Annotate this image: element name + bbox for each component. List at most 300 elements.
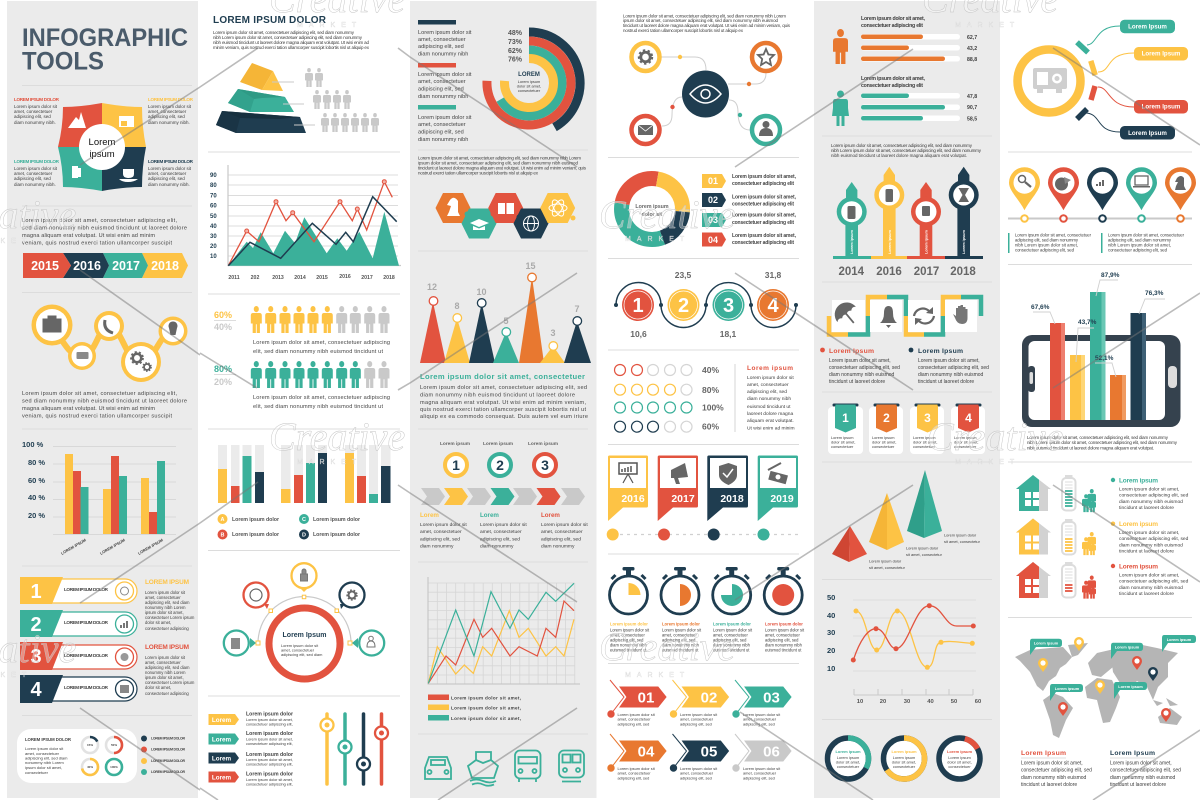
step process: Lorem ipsum dolor sit (480, 523, 527, 528)
paragraph (22, 218, 187, 246)
numbered list: LOREM IPSUM DOLOR (64, 653, 109, 658)
coloured notes: amet, consectetuer (418, 37, 466, 43)
dot ratings: 80% (702, 385, 719, 395)
line and area chart: 2014 (294, 275, 306, 281)
paragraph (831, 143, 982, 158)
icon: bell (880, 306, 897, 328)
icon: open book (498, 203, 514, 214)
curve chart: 30 (904, 699, 910, 705)
3D pyramids (832, 470, 981, 570)
line and area chart: 90 (210, 173, 217, 179)
stopwatch captions: diam nonummy nibh (765, 642, 803, 648)
line and area chart: 2017 (361, 275, 373, 281)
numbered arrows: Lorem ipsum dolor sit (743, 712, 780, 717)
curve chart: 20 (880, 699, 886, 705)
watermark: Creative (599, 192, 735, 237)
numbered arrows: 03 (763, 690, 780, 706)
hub diagram (224, 563, 384, 679)
spike chart caption: Lorem ipsum dolor sit amet, consectetuer adipiscing elit, sed (420, 385, 587, 391)
bar chart: LOREM IPSUM (60, 537, 88, 556)
year flags: 2016 (621, 493, 645, 505)
tower chart: Lorem ipsum (888, 230, 892, 254)
curve chart: 50 (827, 593, 835, 602)
icon: briefcase (43, 316, 61, 332)
segmented donut: dolor sit (642, 212, 663, 218)
line and area chart: 2016 (339, 274, 351, 280)
stopwatch captions: Lorem ipsum dolor (610, 622, 648, 626)
progress rings: consectetuer (837, 764, 860, 769)
bar chart: 20 % (28, 511, 45, 520)
transport icons (425, 750, 584, 786)
coloured notes: Lorem ipsum dolor sit (418, 72, 471, 78)
rating note: laoreet dolore magna (747, 411, 793, 417)
ring legend: LOREM IPSUM DOLOR (151, 748, 185, 752)
line and area chart: 70 (210, 194, 217, 200)
gender bars: male (833, 16, 977, 64)
paragraph: veniam, quis nostrud exerci tation ullamcorper suscipit (22, 240, 172, 246)
people chart 80/20: Lorem ipsum dolor sit amet, consectetuer adipiscing (253, 395, 390, 401)
bookmark cards: dolor sit amet, (831, 440, 855, 444)
map callouts: Lorem ipsum (1034, 640, 1059, 646)
watermark: Creative (927, 414, 1063, 459)
list notes (145, 579, 195, 696)
map captions: consectetuer adipiscing elit, sed (1110, 768, 1181, 774)
3D pyramids: sit amet, consectetur (944, 539, 981, 544)
numbered timeline: 3 (723, 295, 734, 317)
bar chart: 60 % (28, 476, 45, 485)
watermark (0, 0, 1063, 679)
tag list: Lorem ipsum dolor sit amet, (246, 718, 293, 722)
people chart 60/40: 60% (214, 310, 232, 320)
year flags: 2017 (671, 493, 695, 505)
stopwatch captions: Lorem ipsum dolor sit (662, 628, 701, 632)
panel: ring summary: 50% (111, 743, 117, 747)
stopwatch captions: Lorem ipsum dolor (713, 622, 751, 626)
coloured notes: diam nonummy nibh (418, 52, 468, 58)
rating note (735, 364, 795, 432)
zigzag captions: Lorem ipsum dolor sit amet, (829, 358, 891, 364)
icon: laptop (1133, 176, 1150, 188)
numbered arrows: adipiscing elit, sed (618, 721, 649, 726)
numbered list: 1 (30, 581, 42, 603)
watermark: MARKET (297, 22, 362, 29)
household notes: Lorem ipsum (1119, 478, 1158, 484)
paragraph: nostrud exerci tation ullamcorper suscipit lobortis nisl ut aliquip ex (418, 170, 539, 176)
hub diagram: Lorem Ipsum (283, 632, 326, 639)
curve chart: 50 (951, 699, 957, 705)
curve chart: 60 (975, 699, 981, 705)
quadrant captions: LOREM IPSUM DOLOR (14, 97, 60, 102)
list notes: adipiscing elit, sed diam (145, 665, 190, 670)
numbered tags: Lorem ipsum dolor sit amet, (732, 174, 797, 180)
tower chart: 2018 (950, 266, 976, 278)
quadrant captions: Lorem ipsum dolor sit (148, 166, 191, 171)
phone bar chart: 67,6% (1031, 304, 1050, 311)
safe diagram: Lorem Ipsum (1142, 104, 1181, 111)
phone caption: Lorem ipsum dolor sit amet, consectetuer adipiscing elit, sed diam nonummy (1027, 435, 1169, 440)
household notes: consectetuer adipiscing elit, sed (1119, 578, 1189, 584)
map captions: diam nonummy nibh euismod (1110, 775, 1176, 781)
quadrant captions: amet, consectetuer (14, 171, 53, 176)
list notes: nonummy nibh Lorem (145, 670, 186, 675)
year flags: 2018 (720, 493, 744, 505)
quadrant captions: amet, consectetuer (14, 109, 53, 114)
centre label: Lorem (89, 137, 115, 148)
bookmark cards: Lorem ipsum (872, 435, 894, 440)
coloured notes: adipiscing elit, sed (418, 86, 464, 92)
bookmark cards: Lorem ipsum (954, 435, 976, 440)
zigzag captions: diam nonummy nibh euismod (829, 372, 895, 378)
household notes: tincidunt ut laoreet dolore (1119, 505, 1174, 511)
progress rings: dolor sit amet, (836, 760, 860, 764)
zigzag captions: Lorem Ipsum (918, 348, 963, 355)
zigzag captions: tincidunt ut laoreet dolore (918, 379, 974, 385)
icon: shop (119, 116, 134, 127)
spike chart caption (420, 372, 588, 420)
people chart 80/20: 80% (214, 364, 232, 374)
numbered arrows: 06 (763, 744, 780, 760)
stacked bars (218, 445, 390, 503)
numbered tags: Lorem ipsum dolor sit amet, (732, 233, 797, 239)
stopwatch captions: Lorem ipsum dolor sit (765, 628, 804, 632)
stacked bars legend (218, 514, 360, 540)
segmented donut (622, 179, 683, 240)
list notes: dolor sit amet, (145, 620, 171, 625)
spike chart: 5 (503, 316, 509, 326)
people chart 60/40 (214, 306, 390, 355)
dot ratings: 100% (702, 402, 724, 412)
step process: Lorem (420, 512, 439, 519)
bookmark cards: dolor sit amet, (872, 440, 896, 444)
icon: star (758, 49, 774, 65)
phone bar chart: 43,7% (1078, 319, 1097, 326)
numbered arrows: adipiscing elit, sed (618, 775, 649, 780)
tag list: Lorem ipsum dolor sit amet, (246, 758, 293, 762)
centre label: ipsum (89, 149, 115, 160)
stopwatch captions: amet, consectetuer (610, 632, 645, 638)
icon: mini chart (1096, 180, 1104, 186)
panel: ring summary: adipiscing elit, sed diam (25, 756, 68, 760)
zigzag captions: tincidunt ut laoreet dolore (829, 379, 885, 385)
icon: gears (131, 352, 151, 371)
household notes: consectetuer adipiscing elit, sed (1119, 492, 1189, 498)
curve chart: 10 (857, 699, 863, 705)
numbered timeline (614, 270, 798, 339)
quadrant captions: diam nonummy nibh. (14, 120, 56, 125)
household notes: tincidunt ut laoreet dolore (1119, 591, 1174, 597)
pins captions: nibh Lorem ipsum dolor sit amet, (1015, 242, 1078, 248)
gender bars: female: Lorem ipsum dolor sit amet, (861, 76, 926, 82)
coloured notes: adipiscing elit, sed (418, 130, 464, 136)
icon: bus (515, 750, 540, 782)
paragraph: magna aliquam erat volutpat. Ut wisi enim ad minim (22, 233, 155, 239)
stopwatch captions: diam nonummy nibh (610, 642, 648, 648)
step process: Lorem ipsum (440, 441, 470, 447)
stopwatch captions: diam nonummy nibh (713, 642, 751, 648)
coloured notes: diam nonummy nibh (418, 137, 468, 143)
stopwatch captions: adipiscing elit, sed (662, 638, 696, 642)
spike chart caption: aliquip ex ea commodo consequat. Duis autem vel eum iriure (420, 414, 588, 420)
list notes: amet, consectetuer (145, 660, 181, 665)
numbered arrows: amet, consectetuer (743, 771, 777, 776)
panel: ring summary: ipsum dolor sit amet, (25, 765, 62, 770)
step process: amet, consectetuer (480, 529, 522, 535)
intro text: nibh euismod tincidunt ut laoreet dolore magna aliquam erat volutpat. Ut wisi enim ad (213, 40, 369, 45)
zigzag captions: Lorem ipsum dolor sit amet, (918, 358, 980, 364)
stacked bars legend: Lorem ipsum dolor (313, 532, 360, 538)
numbered arrows: Lorem ipsum dolor sit (618, 766, 655, 771)
year flags (608, 456, 798, 521)
progress rings: consectetuer (948, 764, 971, 769)
paragraph: sed diam nonummy nibh euismod tincidunt ut laoreet dolore (22, 398, 187, 404)
rating note: Lorem ipsum dolor sit (747, 376, 794, 381)
numbered timeline: 23,5 (675, 270, 692, 280)
phone bar chart: 52,1% (1095, 355, 1114, 362)
panel: ring summary: nonummy nibh Lorem (25, 760, 64, 765)
numbered arrows: Lorem ipsum dolor sit (680, 712, 717, 717)
stopwatch captions: Lorem ipsum dolor (662, 622, 700, 626)
phone caption (1027, 435, 1178, 450)
numbered arrows: adipiscing elit, sed (680, 775, 712, 780)
quadrant captions: amet, consectetuer (148, 109, 187, 114)
icon: envelope (638, 125, 653, 135)
line and area chart: 2013 (272, 275, 284, 281)
paragraph (623, 14, 791, 33)
coloured notes: adipiscing elit, sed (418, 44, 464, 50)
household notes: tincidunt ut laoreet dolore (1119, 548, 1174, 554)
stopwatch captions: amet, consectetuer (713, 632, 748, 638)
step process: 2 (496, 457, 504, 473)
world map (1015, 635, 1196, 738)
bookmark cards: 1 (842, 411, 849, 425)
curve chart: 10 (827, 664, 835, 673)
numbered list: 2 (30, 614, 42, 636)
icon: safe (1033, 68, 1067, 93)
intro text: minim veniam, quis nostrud exerci tation ullamcorper suscipit lobortis nisl ut aliquip ex (213, 45, 370, 50)
phone caption: nibh euismod tincidunt ut laoreet dolore magna aliquam erat volutpat. (1027, 446, 1154, 450)
tower chart: 2014 (839, 266, 865, 278)
hub diagram: Lorem ipsum dolor sit (281, 643, 318, 648)
bar chart: 80 % (28, 458, 45, 467)
paragraph: tincidunt ut laoreet dolore magna aliquam erat volutpat. Ut wisi enim ad minim veniam, quis (418, 166, 587, 170)
icon: chess knight (1175, 176, 1186, 190)
list notes: ipsum dolor sit amet, (145, 675, 184, 680)
icon: hand (953, 305, 968, 324)
map captions (1021, 750, 1181, 788)
tag list: consectetuer adipiscing elit, (246, 782, 293, 786)
gender bars: female: 58,5 (967, 116, 977, 122)
icon: phone (105, 320, 113, 333)
ring legend: LOREM IPSUM DOLOR (151, 736, 185, 740)
quadrant captions: Lorem ipsum dolor sit (14, 166, 57, 171)
panel: ring summary (17, 729, 137, 783)
household notes: Lorem ipsum dolor sit amet, (1119, 574, 1179, 578)
numbered list: LOREM IPSUM DOLOR (64, 620, 109, 625)
tower chart: 2017 (914, 266, 939, 278)
stacked bars legend: C (302, 517, 306, 523)
paragraph (418, 156, 587, 176)
numbered arrows: amet, consectetuer (743, 717, 777, 722)
rating note: aliquam erat volutpat. (747, 418, 794, 424)
map callouts (1030, 635, 1196, 701)
list notes: consectetuer Lorem ipsum (145, 615, 195, 620)
quadrant diagram (58, 103, 146, 191)
coloured notes: diam nonummy nibh (418, 94, 468, 100)
household notes: consectetuer adipiscing elit, sed (1119, 536, 1189, 542)
spike chart: 3 (550, 328, 556, 338)
year arrows (23, 253, 188, 278)
phone bar chart (1022, 272, 1180, 427)
household notes: diam nonummy nibh euismod (1119, 542, 1183, 548)
numbered tags (702, 174, 797, 246)
stopwatch captions: amet, consectetuer (662, 632, 697, 638)
list notes: consectetuer adipiscing (145, 626, 189, 631)
rating note: Lorem ipsum (747, 365, 793, 372)
tag list: Lorem (212, 756, 232, 762)
bars (1050, 292, 1146, 420)
safe diagram: Lorem Ipsum (1128, 24, 1167, 31)
numbered list: 3 (30, 646, 42, 668)
numbered arrows: 01 (638, 690, 654, 706)
list notes: LOREM IPSUM (145, 644, 189, 651)
quadrant captions: amet, consectetuer (148, 171, 187, 176)
numbered arrows: amet, consectetuer (618, 717, 651, 722)
ring legend: LOREM IPSUM DOLOR (151, 759, 185, 763)
spike chart (420, 261, 591, 363)
bookmark cards: dolor sit amet, (913, 440, 937, 444)
paragraph: Lorem ipsum dolor sit amet, consectetuer adipiscing elit, sed diam nonummy (831, 143, 973, 148)
stopwatch captions: adipiscing elit, sed (713, 638, 747, 642)
numbered list: 4 (30, 679, 42, 701)
intro text: Lorem ipsum dolor sit amet, consectetuer adipiscing elit, sed diam nonummy (213, 30, 355, 35)
spike chart caption: diam nonummy nibh euismod tincidunt ut laoreet dolore (420, 392, 575, 398)
numbered timeline: 2 (678, 295, 689, 317)
paragraph: Lorem ipsum dolor sit amet, consectetuer adipiscing elit, sed diam nonummy nibh Lorem (623, 14, 786, 18)
dot ratings: 60% (702, 422, 719, 432)
pins captions: Lorem ipsum dolor sit amet, consectetuer (1015, 232, 1092, 238)
list notes: consectetuer adipiscing (145, 691, 189, 696)
list notes: Lorem ipsum dolor sit (145, 590, 185, 595)
pins captions: Lorem ipsum dolor sit amet, consectetuer (1108, 232, 1185, 238)
paragraph: Lorem ipsum dolor sit amet, consectetuer adipiscing elit, sed diam nonummy nibh Lorem (418, 156, 581, 160)
year arrows: 2018 (151, 259, 179, 273)
gender bars: female: 90,7 (967, 105, 977, 111)
bookmark cards: Lorem ipsum (913, 435, 936, 440)
ring legend (141, 736, 185, 775)
bookmark cards: consectetuer (831, 444, 854, 449)
icon: presentation board (619, 463, 637, 483)
curve chart: 40 (827, 611, 835, 620)
rating note: euismod tincidunt ut (747, 404, 791, 410)
tag list: Lorem ipsum dolor sit amet, (246, 738, 293, 742)
list notes: nonummy nibh Lorem (145, 605, 186, 610)
hub diagram: adipiscing elit, sed diam (281, 652, 322, 657)
bookmark cards: dolor sit amet, (954, 440, 978, 444)
watermark: MARKET (297, 459, 362, 466)
radial bar chart (487, 30, 580, 127)
line and area chart: 40 (210, 224, 217, 230)
map callouts: Lorem ipsum (1118, 684, 1143, 689)
paragraph: Lorem ipsum dolor sit amet, consectetuer adipiscing elit, (22, 218, 177, 224)
numbered tags: Lorem ipsum dolor sit amet, (732, 212, 797, 218)
numbered list: LOREM IPSUM DOLOR (64, 587, 109, 592)
quadrant captions: diam nonummy nibh. (14, 182, 56, 187)
watermark: MARKET (955, 459, 1020, 466)
icon: atom (549, 198, 567, 218)
tower chart: Lorem ipsum (924, 230, 928, 254)
paragraph: nostrud exerci tation ullamcorper suscipit lobortis nisl ut aliquip ex (623, 28, 744, 33)
icon: chat (76, 352, 88, 359)
household notes: diam nonummy nibh euismod (1119, 585, 1183, 591)
stopwatch captions: euismod tincidunt ut (713, 648, 750, 652)
map captions: Lorem ipsum dolor sit amet, (1021, 760, 1083, 766)
bookmark cards: 3 (924, 411, 931, 425)
3D pyramids: sit amet, consectetur (906, 552, 943, 557)
map captions: Lorem ipsum dolor sit amet, (1110, 760, 1172, 766)
year arrows: 2016 (73, 259, 101, 273)
numbered tags: 03 (708, 215, 718, 225)
stacked bars legend: Lorem ipsum dolor (232, 517, 279, 523)
line and area chart: 20 (210, 244, 217, 250)
list notes: amet, consectetuer (145, 595, 181, 600)
3D pyramids: Lorem ipsum dolor (906, 546, 938, 550)
safe diagram: Lorem Ipsum (1142, 51, 1181, 58)
pins captions: adipiscing elit, sed diam nonummy (1015, 238, 1079, 242)
spike chart: 8 (454, 301, 460, 311)
3D pyramids: sit amet, consectetur (869, 565, 906, 570)
quadrant captions: adipiscing elit, sed (14, 176, 51, 181)
stacked bars legend: D (302, 532, 306, 538)
progress rings: dolor sit amet, (892, 760, 916, 764)
bookmark cards: 4 (965, 411, 972, 425)
rating note: amet, consectetuer (747, 382, 789, 388)
panel: ring summary: 15% (87, 743, 93, 747)
step process: Lorem ipsum dolor sit (541, 523, 588, 528)
ring legend: LOREM IPSUM DOLOR (151, 770, 185, 774)
icon: megaphone (671, 463, 688, 484)
watermark: Creative (599, 624, 735, 669)
3D pyramids: Lorem ipsum dolor (944, 532, 976, 538)
map captions: Lorem Ipsum (1110, 750, 1155, 757)
curve chart: 20 (827, 646, 835, 655)
step process: Lorem ipsum (528, 441, 558, 447)
step process: amet, consectetuer (541, 529, 583, 535)
tower chart (833, 167, 983, 278)
year flags: 2019 (770, 493, 794, 505)
map callouts: Lorem ipsum (1055, 686, 1080, 691)
segmented donut: Lorem ipsum (635, 204, 669, 210)
title: INFOGRAPHIC (22, 24, 188, 52)
grid line chart: Lorem ipsum dolor sit amet, (451, 706, 521, 710)
paragraph: veniam, quis nostrud exerci tation ullamcorper suscipit (22, 414, 172, 420)
gender bars: female (832, 76, 977, 126)
icon: banknotes (768, 463, 788, 484)
line and area chart: 202 (251, 275, 259, 281)
people chart 80/20: elit, sed diam nonummy nibh euismod tincidunt ut (253, 404, 383, 410)
numbered arrows: Lorem ipsum dolor sit (743, 766, 780, 771)
icon: shield (719, 463, 737, 485)
numbered arrows: amet, consectetuer (618, 771, 651, 776)
spike chart caption: quis nostrud exerci tation ullamcorper suscipit lobortis nisl ut (420, 407, 586, 413)
stopwatch captions: Lorem ipsum dolor sit (610, 628, 649, 632)
step process: 3 (541, 457, 549, 473)
coloured notes: Lorem ipsum dolor sit (418, 30, 471, 36)
step process: 1 (452, 457, 460, 473)
step process: Lorem (480, 512, 499, 519)
line and area chart: 2018 (383, 275, 395, 281)
icon: mountain (68, 112, 86, 128)
heading: column 2: LOREM IPSUM DOLOR (213, 15, 327, 26)
